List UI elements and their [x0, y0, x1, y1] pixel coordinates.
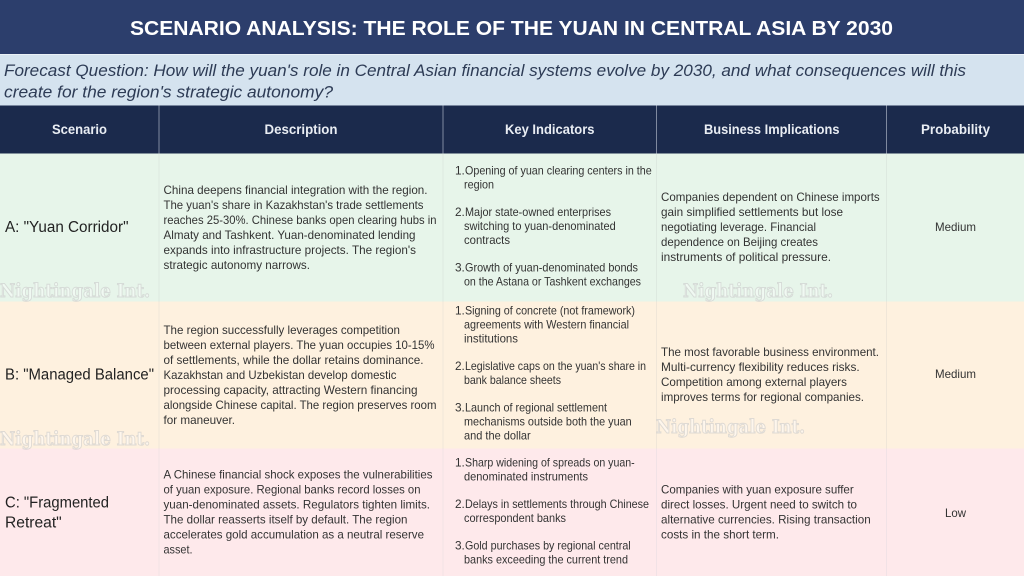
scenario B description	[164, 323, 437, 427]
scenario C key indicators: Gold purchases by regional central	[465, 539, 631, 553]
scenario C description: A Chinese financial shock exposes the vulnerabilities	[164, 468, 433, 482]
scenario C description	[164, 468, 433, 556]
scenario B key indicators: Legislative caps on the yuan's share in	[465, 359, 646, 373]
scenario A key indicators: Opening of yuan clearing centers in the	[465, 164, 652, 178]
scenario B business implications	[661, 345, 879, 404]
scenario C key indicators	[455, 456, 649, 566]
scenario C key indicators: 1.	[455, 456, 465, 470]
scenario A business implications	[661, 190, 880, 264]
scenario A description: Almaty and Tashkent. Yuan-denominated lending	[164, 228, 416, 242]
forecast question: create for the region's strategic autonomy?	[4, 82, 334, 102]
watermarks: Nightingale Int.	[0, 280, 150, 302]
scenario A key indicators: Major state-owned enterprises	[465, 205, 611, 219]
row A: Yuan Corridor	[0, 154, 1024, 302]
scenario C key indicators: Sharp widening of spreads on yuan-	[465, 456, 635, 470]
forecast question: Forecast Question: How will the yuan's role in Central Asian financial systems evolve by 2030, and what consequences will this	[4, 61, 966, 80]
scenario A key indicators: Growth of yuan-denominated bonds	[465, 260, 638, 274]
scenario C business implications	[661, 483, 871, 542]
scenario B description: Kazakhstan and Uzbekistan develop domestic	[164, 368, 397, 382]
scenario A key indicators: switching to yuan-denominated	[464, 219, 616, 233]
scenario A description	[164, 183, 436, 272]
scenario C key indicators: Delays in settlements through Chinese	[465, 497, 649, 511]
scenario B key indicators	[455, 304, 646, 442]
row C: Fragmented Retreat	[0, 448, 1024, 576]
scenario A key indicators: 3.	[455, 260, 465, 274]
scenario C key indicators: 3.	[455, 539, 465, 553]
scenario B key indicators: mechanisms outside both the yuan	[464, 415, 632, 429]
row B: Managed Balance	[0, 302, 1024, 448]
scenario B key indicators: Launch of regional settlement	[465, 401, 608, 415]
scenario B description: alongside Chinese capital. The region preserves room	[164, 398, 437, 412]
scenario B business implications: improves terms for regional companies.	[661, 390, 864, 404]
title banner	[0, 0, 1024, 54]
scenario B business implications: The most favorable business environment.	[661, 345, 879, 359]
scenario B key indicators: agreements with Western financial	[464, 318, 629, 332]
table header row: Description	[264, 122, 338, 137]
scenario A business implications: instruments of political pressure.	[661, 250, 831, 264]
scenario C key indicators: banks exceeding the current trend	[464, 552, 628, 566]
scenario B key indicators: 3.	[455, 401, 465, 415]
scenario B key indicators: institutions	[464, 332, 518, 346]
table header row: Business Implications	[704, 122, 840, 137]
table header row: Key Indicators	[505, 122, 594, 137]
scenario A description: reaches 25-30%. Chinese banks open clearing hubs in	[164, 213, 436, 227]
watermarks: Nightingale Int.	[683, 280, 833, 302]
scenario C business implications: direct losses. Urgent need to switch to	[661, 498, 857, 512]
scenario A key indicators: region	[464, 178, 494, 192]
scenario A business implications: Companies dependent on Chinese imports	[661, 190, 880, 204]
scenario A business implications: negotiating leverage. Financial	[661, 220, 816, 234]
scenario C key indicators: correspondent banks	[464, 511, 566, 525]
scenario C key indicators: 2.	[455, 497, 465, 511]
scenario B key indicators: Signing of concrete (not framework)	[465, 304, 635, 318]
watermarks: Nightingale Int.	[0, 428, 150, 450]
scenario B key indicators: bank balance sheets	[464, 373, 561, 387]
scenario A key indicators: 1.	[455, 164, 465, 178]
scenario B key indicators: 1.	[455, 304, 465, 318]
scenario A probability: Medium	[935, 220, 976, 234]
scenario C business implications: alternative currencies. Rising transaction	[661, 513, 871, 527]
scenario B description: between external players. The yuan occupies 10-15%	[164, 338, 435, 352]
scenario A description: expands into infrastructure projects. The region's	[164, 243, 416, 257]
scenario B name: B: "Managed Balance"	[5, 366, 154, 384]
scenario B description: processing capacity, attracting Western financing	[164, 383, 418, 397]
scenario A key indicators: on the Astana or Tashkent exchanges	[464, 274, 641, 288]
scenario C description: The dollar reasserts itself by default. The region	[164, 512, 408, 526]
scenario B description: The region successfully leverages competition	[164, 323, 400, 337]
scenario B description: for maneuver.	[164, 413, 235, 427]
scenario B business implications: Multi-currency flexibility reduces risks.	[661, 360, 860, 374]
table header row	[0, 106, 1024, 154]
scenario A key indicators	[455, 164, 652, 288]
scenario C business implications: costs in the short term.	[661, 528, 779, 542]
forecast question	[0, 54, 1024, 106]
scenario A description: strategic autonomy narrows.	[164, 258, 310, 272]
scenario A business implications: dependence on Beijing creates	[661, 235, 818, 249]
scenario C name	[5, 494, 109, 532]
scenario A key indicators: 2.	[455, 205, 465, 219]
scenario C name: C: "Fragmented	[5, 494, 109, 512]
scenario B key indicators: 2.	[455, 359, 465, 373]
scenario C key indicators: denominated instruments	[464, 470, 588, 484]
scenario C description: accelerates gold accumulation as a neutral reserve	[164, 528, 424, 542]
scenario C business implications: Companies with yuan exposure suffer	[661, 483, 854, 497]
scenario B probability: Medium	[935, 367, 976, 381]
table header row: Scenario	[52, 122, 107, 137]
scenario A description: The yuan's share in Kazakhstan's trade settlements	[164, 198, 424, 212]
scenario A business implications: gain simplified settlements but lose	[661, 205, 843, 219]
scenario C probability: Low	[945, 506, 966, 520]
scenario A key indicators: contracts	[464, 233, 510, 247]
watermarks: Nightingale Int.	[656, 416, 805, 438]
table header row: Probability	[921, 122, 990, 137]
scenario A description: China deepens financial integration with the region.	[164, 183, 428, 197]
scenario B business implications: Competition among external players	[661, 375, 847, 389]
scenario C description: asset.	[164, 542, 192, 556]
scenario C description: of yuan exposure. Regional banks record losses on	[164, 482, 420, 496]
watermarks	[0, 280, 833, 450]
title banner: SCENARIO ANALYSIS: THE ROLE OF THE YUAN IN CENTRAL ASIA BY 2030	[130, 17, 893, 40]
scenario B key indicators: and the dollar	[464, 428, 531, 442]
scenario C name: Retreat"	[5, 514, 62, 532]
scenario A name: A: "Yuan Corridor"	[5, 219, 128, 236]
scenario B description: of settlements, while the dollar retains dominance.	[164, 353, 424, 367]
scenario C description: yuan-denominated assets. Regulators tighten limits.	[164, 498, 430, 512]
